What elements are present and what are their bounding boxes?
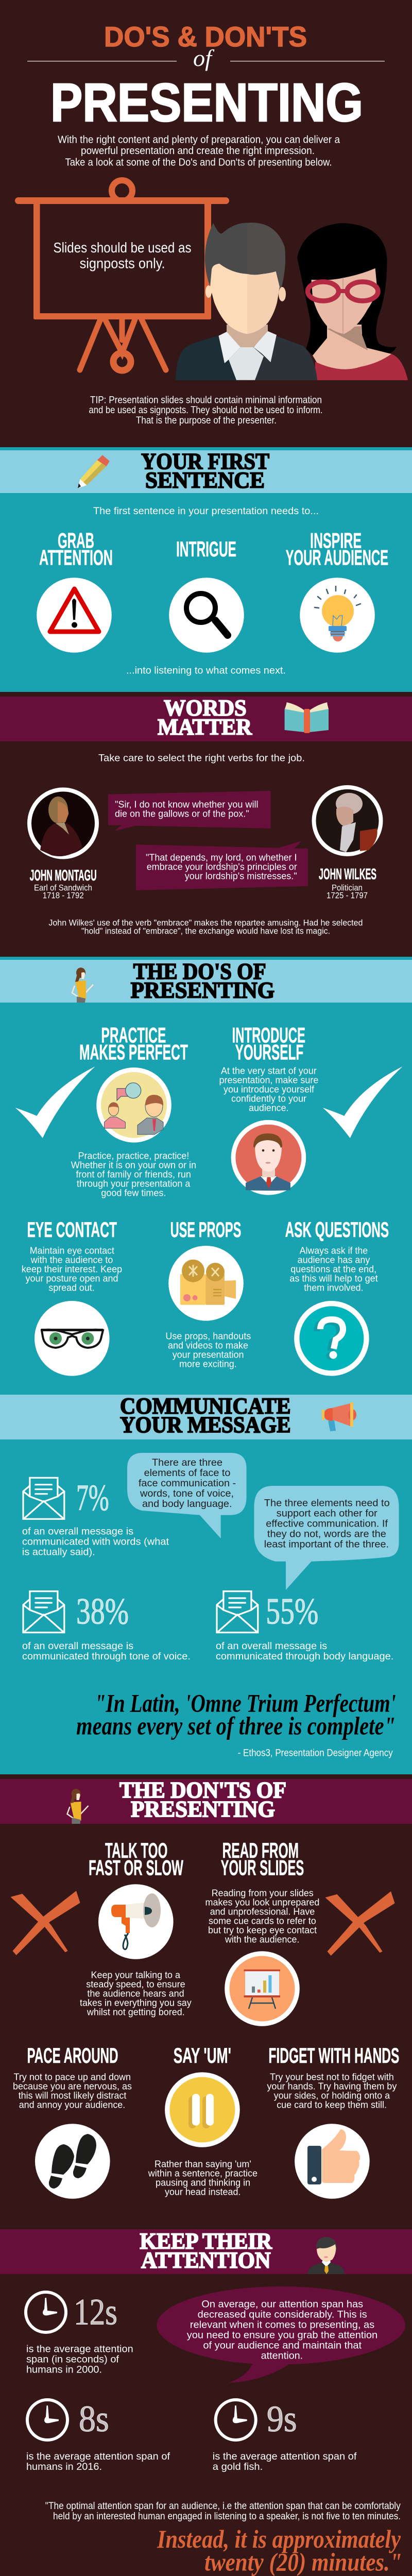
stat: 12 seconds: span (in seconds) of xyxy=(26,2354,119,2365)
body text: Whether it is on your own or in xyxy=(71,1159,196,1170)
body text xyxy=(71,1150,196,1198)
icon: slide chart on easel xyxy=(244,1970,280,2009)
title: DO'S & DON'TS xyxy=(104,21,307,53)
panel: the don'ts of presenting xyxy=(0,1774,412,2229)
board text: signposts only. xyxy=(80,256,165,272)
caption: John Montagu: Earl of Sandwich xyxy=(34,883,92,892)
icon: check mark xyxy=(15,1066,95,1138)
stat: 38 percent: 38% xyxy=(76,1591,129,1632)
heading: your first sentence xyxy=(141,449,269,493)
speech bubble: Montagu quote xyxy=(108,791,271,831)
body text: Maintain eye contact xyxy=(30,1245,114,1256)
text: select the right verbs: Take care to select the right verbs for the job. xyxy=(98,753,305,764)
icon: clock xyxy=(26,2292,66,2332)
icon: light bulb xyxy=(315,586,360,641)
item: use props: USE PROPS xyxy=(170,1217,241,1242)
body text xyxy=(80,1969,192,2017)
speech bubble: attention span: of your audience and maintain that xyxy=(203,2340,362,2351)
stat: 9 seconds: 9s xyxy=(267,2398,297,2439)
speech bubble: Wilkes quote: embrace your lordship's principles or xyxy=(147,861,297,872)
item: talk too fast or slow: TALK TOO xyxy=(105,1838,167,1862)
body text: with the audience. xyxy=(225,1934,299,1944)
body text: and unprofessional. Have xyxy=(210,1906,315,1917)
body text: more exciting. xyxy=(179,1358,237,1369)
stat: 12 seconds xyxy=(26,2292,133,2376)
speech bubble: support each other xyxy=(254,1486,399,1590)
body text xyxy=(289,1245,378,1293)
column: intrigue xyxy=(169,537,244,653)
title xyxy=(27,21,385,133)
speech bubble: Montagu quote: die on the gallows or of the pox." xyxy=(115,808,249,819)
icon: man in black suit xyxy=(307,2237,345,2274)
speech bubble: attention span: attention. xyxy=(261,2350,303,2361)
speech bubble: attention span: relevant when it comes to presenting, as xyxy=(190,2319,374,2330)
icon: clock xyxy=(216,2400,256,2440)
panel: keep their attention xyxy=(0,2228,412,2576)
speech bubble: support each other: least important of the three. xyxy=(264,1538,389,1550)
board text: Slides should be used as xyxy=(54,240,192,256)
body text xyxy=(219,1065,318,1113)
icon: man avatar xyxy=(246,1133,290,1191)
speech bubble: attention span: On average, our attention span has xyxy=(201,2298,363,2310)
intro text: With the right content and plenty of preparation, you can deliver a xyxy=(58,134,340,146)
body text: with the audience to xyxy=(30,1254,113,1265)
body text: Reading from your slides xyxy=(212,1887,314,1898)
quote: omne trium perfectum xyxy=(76,1689,396,1758)
item: practice makes perfect: PRACTICE xyxy=(101,1023,166,1047)
panel: your first sentence xyxy=(0,447,412,692)
speech bubble: support each other: they do not, words are the xyxy=(267,1528,386,1539)
panel: the do's of presenting xyxy=(0,957,412,1395)
stat: 55 percent: 55% xyxy=(266,1591,318,1632)
icon: cross xyxy=(325,1891,395,1956)
icon: woman presenter xyxy=(72,968,93,1003)
stat: 7 percent xyxy=(22,1477,169,1557)
panel: hero xyxy=(0,0,412,447)
icon: clock xyxy=(27,2400,67,2440)
item: pace around xyxy=(13,2043,132,2199)
body text: steady speed, to ensure xyxy=(86,1978,185,1989)
body text: Keep your talking to a xyxy=(91,1969,181,1980)
body text: but try to keep eye contact xyxy=(208,1924,317,1935)
caption: John Montagu: JOHN MONTAGU xyxy=(30,867,97,884)
body text: some cue cards to refer to xyxy=(209,1915,316,1926)
column: intrigue: INTRIGUE xyxy=(176,537,236,561)
item: introduce yourself: YOURSELF xyxy=(235,1040,303,1064)
stat: 7 percent: of an overall message is xyxy=(22,1526,133,1537)
speech bubble: attention span xyxy=(157,2286,405,2383)
caption: John Wilkes xyxy=(319,866,376,900)
tip text xyxy=(89,395,322,426)
body text: confidently to your xyxy=(231,1093,306,1104)
stat: 38 percent xyxy=(22,1591,191,1662)
item: eye contact xyxy=(22,1217,122,1376)
body text: this will most likely distract xyxy=(19,2090,126,2100)
item: fidget with hands xyxy=(267,2043,399,2199)
item: eye contact: EYE CONTACT xyxy=(27,1217,117,1242)
icon: shoe prints xyxy=(49,2134,96,2189)
stat: 9 seconds: a gold fish. xyxy=(213,2461,263,2472)
heading: the don'ts of presenting: PRESENTING xyxy=(131,1797,275,1822)
body text xyxy=(13,2071,132,2110)
body text: Practice, practice, practice! xyxy=(78,1150,189,1161)
body text: spread out. xyxy=(48,1282,95,1293)
intro text: Take a look at some of the Do's and Don'ts of presenting below. xyxy=(65,157,332,168)
body text: because you are nervous, as xyxy=(13,2080,132,2091)
item: practice makes perfect: MAKES PERFECT xyxy=(79,1040,188,1064)
tip text: and be used as signposts. They should not be used to inform. xyxy=(89,404,322,416)
intro line: The first sentence in your presentation needs to... xyxy=(93,505,319,517)
icon: check mark xyxy=(323,1066,403,1138)
item: use props xyxy=(165,1217,251,1369)
speech bubble: support each other: The three elements need to xyxy=(264,1497,390,1509)
body text: presentation, make sure xyxy=(219,1074,318,1085)
body text: your hands. Try having them by xyxy=(267,2080,397,2091)
item: practice makes perfect xyxy=(15,1023,196,1198)
stat: 12 seconds: is the average attention xyxy=(26,2344,133,2355)
icon: megaphone xyxy=(322,1402,356,1431)
body text: At the very start of your xyxy=(221,1065,317,1076)
speech bubble: attention span: decreased quite considerably. This is xyxy=(198,2309,367,2320)
stat: 8 seconds xyxy=(26,2398,170,2472)
quote: omne trium perfectum: - Ethos3, Presentation Designer Agency xyxy=(238,1747,393,1758)
body text: the audience hears and xyxy=(87,1988,184,1998)
icon: pause button xyxy=(165,2072,240,2147)
body text: makes you look unprepared xyxy=(205,1896,319,1907)
icon: woman presenter xyxy=(67,1789,89,1824)
heading: communicate your message: YOUR MESSAGE xyxy=(120,1412,291,1437)
icon: man in suit xyxy=(176,223,317,380)
body text: you introduce yourself xyxy=(224,1083,315,1094)
caption: John Montagu xyxy=(30,867,97,900)
caption: John Montagu: 1718 - 1792 xyxy=(43,890,84,900)
column: grab attention: GRAB xyxy=(58,528,94,552)
portrait: John Montagu xyxy=(29,789,97,857)
speech bubble: three elements: There are three xyxy=(152,1457,222,1468)
caption: John Wilkes: 1725 - 1797 xyxy=(327,890,368,900)
speech bubble: support each other: effective communication. If xyxy=(266,1518,388,1529)
icon: envelope xyxy=(23,1478,64,1519)
explanation text xyxy=(48,918,363,936)
item: read from your slides xyxy=(205,1838,395,2026)
speech bubble: three elements: words, tone of voice, xyxy=(140,1488,234,1499)
body text: cue card to keep them still. xyxy=(277,2099,387,2110)
heading: communicate your message xyxy=(120,1393,291,1437)
icon: envelope xyxy=(217,1591,258,1633)
icon: pencil xyxy=(78,455,110,488)
item: ask questions xyxy=(285,1217,389,1376)
explanation text: John Wilkes' use of the verb "embrace" makes the repartee amusing. Had he selected xyxy=(48,918,363,928)
body text: within a sentence, practice xyxy=(148,2167,258,2178)
heading: words matter xyxy=(158,695,252,740)
icon: envelope xyxy=(23,1591,64,1633)
body text: them involved. xyxy=(304,1282,364,1293)
body text: as this will help to get xyxy=(289,1273,378,1283)
speech bubble: Wilkes quote: "That depends, my lord, on whether I xyxy=(146,852,297,863)
stat: 9 seconds xyxy=(213,2398,357,2472)
stat: 55 percent xyxy=(216,1591,393,1662)
item: pace around: PACE AROUND xyxy=(27,2043,118,2067)
body text: audience has any xyxy=(298,1254,370,1265)
title: PRESENTING xyxy=(50,73,363,133)
item: introduce yourself: INTRODUCE xyxy=(232,1023,305,1047)
speech bubble: three elements: and body language. xyxy=(142,1498,232,1510)
stat: 38 percent: of an overall message is xyxy=(22,1640,133,1652)
stat: 12 seconds: humans in 2000. xyxy=(26,2364,102,2376)
tip text: That is the purpose of the presenter. xyxy=(136,415,277,426)
body text: through your presentation a xyxy=(77,1178,191,1189)
body text: your head instead. xyxy=(165,2186,241,2197)
body text xyxy=(22,1245,122,1293)
body text: Rather than saying 'um' xyxy=(154,2158,251,2169)
body text: your sides, or holding onto a xyxy=(274,2090,390,2100)
board text xyxy=(54,240,192,272)
heading: keep their attention xyxy=(140,2228,272,2273)
body text: takes in everything you say xyxy=(80,1997,192,2008)
body text xyxy=(148,2158,258,2197)
body text: Use props, handouts xyxy=(165,1330,251,1341)
body text: pausing and thinking in xyxy=(156,2177,250,2188)
item: introduce yourself xyxy=(219,1023,403,1195)
stat: 8 seconds: is the average attention span of xyxy=(26,2451,170,2462)
body text: whilst not getting bored. xyxy=(87,2006,185,2017)
heading: your first sentence: YOUR FIRST xyxy=(141,449,269,474)
item: read from your slides: YOUR SLIDES xyxy=(221,1855,304,1879)
body text: Always ask if the xyxy=(300,1245,368,1256)
portrait: John Wilkes xyxy=(314,787,381,854)
stat: 55 percent: communicated through body language. xyxy=(216,1651,393,1662)
quote: optimal attention span xyxy=(45,2500,402,2576)
body text xyxy=(205,1887,319,1944)
icon: woman with glasses xyxy=(297,223,408,380)
heading: the do's of presenting: PRESENTING xyxy=(131,978,274,1003)
speech bubble: three elements xyxy=(127,1453,247,1538)
speech bubble: support each other: support each other for xyxy=(277,1507,377,1519)
item: talk too fast or slow xyxy=(10,1838,192,2017)
stat: 7 percent: is actually said). xyxy=(22,1546,95,1557)
heading: keep their attention: ATTENTION xyxy=(141,2248,271,2273)
stat: 55 percent: of an overall message is xyxy=(216,1640,327,1652)
intro text: powerful presentation and create the right impression. xyxy=(81,145,315,157)
icon: glasses with eyes xyxy=(41,1329,104,1348)
tip text: TIP: Presentation slides should contain minimal information xyxy=(90,395,322,406)
body text: keep their interest. Keep xyxy=(22,1263,122,1274)
body text: front of family or friends, run xyxy=(76,1168,191,1179)
column: grab attention: ATTENTION xyxy=(39,546,113,570)
stat: 8 seconds: 8s xyxy=(79,2398,109,2439)
heading: the do's of presenting: THE DO'S OF xyxy=(133,959,266,984)
column: grab attention xyxy=(37,528,113,653)
item: read from your slides: READ FROM xyxy=(222,1838,299,1862)
item: say um xyxy=(148,2043,258,2197)
speech bubble: Montagu quote: "Sir, I do not know whether you will xyxy=(115,799,259,810)
explanation text: "hold" instead of "embrace", the exchange would have lost its magic. xyxy=(81,926,330,936)
body text: your posture open and xyxy=(26,1273,118,1283)
column: inspire your audience: INSPIRE xyxy=(310,528,362,552)
icon: thumbs up xyxy=(307,2129,360,2184)
closing line: ...into listening to what comes next. xyxy=(126,665,286,676)
icon: cross xyxy=(10,1891,80,1955)
speech bubble: Wilkes quote: your lordship's mistresses." xyxy=(185,871,297,882)
body text: Try your best not to fidget with xyxy=(270,2071,394,2082)
title: of xyxy=(193,45,215,71)
heading: communicate your message: COMMUNICATE xyxy=(120,1393,291,1418)
icon: presentation board xyxy=(15,180,229,370)
heading: words matter: MATTER xyxy=(158,715,252,740)
heading: words matter: WORDS xyxy=(164,695,247,720)
heading: your first sentence: SENTENCE xyxy=(145,468,265,493)
item: talk too fast or slow: FAST OR SLOW xyxy=(89,1855,183,1879)
stat: 9 seconds: is the average attention span of xyxy=(213,2451,357,2462)
column: inspire your audience xyxy=(286,528,388,653)
speech bubble: three elements: elements of face to xyxy=(144,1467,231,1479)
heading: keep their attention: KEEP THEIR xyxy=(140,2228,272,2253)
body text: your presentation xyxy=(173,1349,244,1360)
body text: questions at the end, xyxy=(290,1263,376,1274)
caption: John Wilkes: Politician xyxy=(332,883,363,892)
speech bubble: Wilkes quote xyxy=(136,841,308,890)
icon: open book xyxy=(285,702,329,733)
body text xyxy=(267,2071,397,2110)
icon: two people talking xyxy=(104,1083,163,1134)
heading: the do's of presenting xyxy=(131,959,274,1003)
item: say um: SAY 'UM' xyxy=(174,2043,231,2067)
stat: 8 seconds: humans in 2016. xyxy=(26,2461,102,2472)
body text: and videos to make xyxy=(168,1340,248,1350)
stat: 38 percent: communicated through tone of voice. xyxy=(22,1651,191,1662)
heading: the don'ts of presenting: THE DON'TS OF xyxy=(119,1777,286,1803)
icon: film projector xyxy=(180,1260,236,1305)
body text xyxy=(165,1330,251,1369)
body text: good few times. xyxy=(101,1187,166,1198)
icon: warning triangle xyxy=(50,589,99,632)
heading: the don'ts of presenting xyxy=(119,1777,286,1822)
icon: loudhailer xyxy=(111,1893,161,1950)
intro text xyxy=(58,134,340,168)
panel: words matter xyxy=(0,692,412,957)
icon: question mark xyxy=(294,1301,369,1376)
speech bubble: three elements: face communication - xyxy=(139,1478,236,1489)
stat: 7 percent: 7% xyxy=(76,1477,109,1518)
stat: 7 percent: communicated with words (what xyxy=(22,1536,169,1547)
icon: magnifying glass xyxy=(186,594,228,635)
body text: Try not to pace up and down xyxy=(13,2071,131,2082)
speech bubble: attention span: you need to ensure you grab the attention xyxy=(187,2329,377,2341)
stat: 12 seconds: 12s xyxy=(74,2292,117,2333)
body text: and annoy your audience. xyxy=(19,2099,125,2110)
body text: audience. xyxy=(249,1102,288,1113)
panel: communicate your message xyxy=(0,1393,412,1774)
